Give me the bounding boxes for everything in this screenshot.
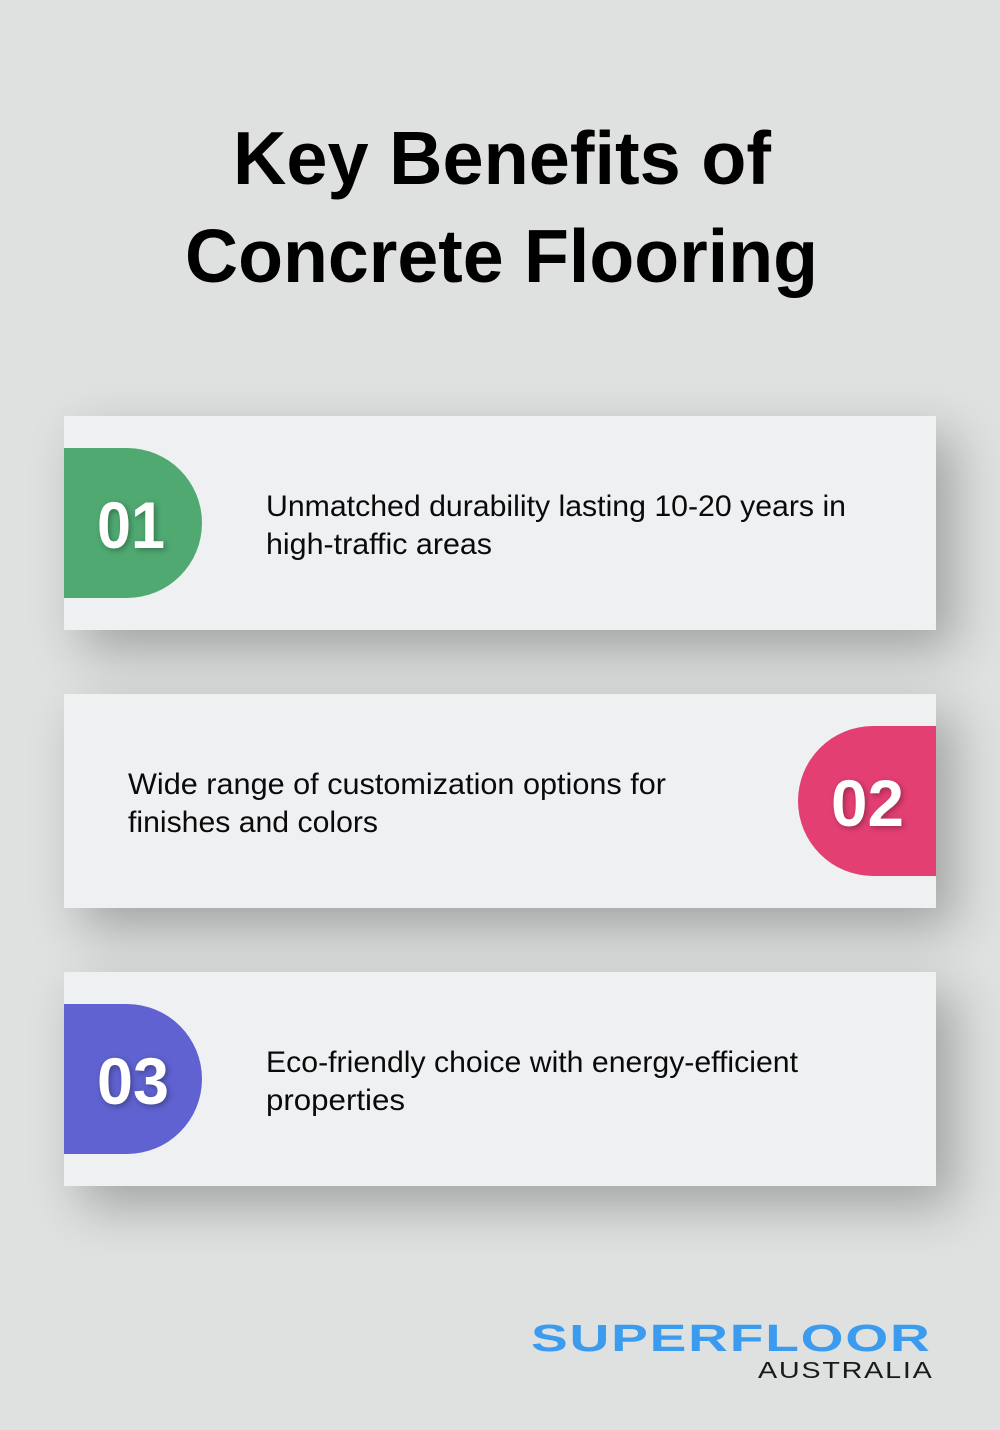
panel: benefit 03 bbox=[64, 972, 936, 1186]
text: benefit 01: high-traffic areas bbox=[266, 528, 492, 561]
text: benefit 02 bbox=[128, 768, 666, 839]
badge: 02: 02 bbox=[831, 766, 904, 840]
logo: Superfloor Australia: AUSTRALIA bbox=[758, 1357, 932, 1383]
text: benefit 01 bbox=[266, 490, 846, 561]
badge: 01: 01 bbox=[97, 488, 165, 562]
badge: 02 bbox=[798, 726, 936, 876]
title: Concrete Flooring bbox=[185, 214, 818, 298]
text: benefit 03: properties bbox=[266, 1084, 405, 1117]
badge: 03 bbox=[64, 1004, 202, 1154]
badge: 01 bbox=[64, 448, 202, 598]
badge: 03: 03 bbox=[97, 1044, 169, 1118]
title: Key Benefits of bbox=[233, 116, 772, 200]
text: benefit 03 bbox=[266, 1046, 799, 1117]
logo: Superfloor Australia: SUPERFLOOR bbox=[531, 1317, 930, 1360]
panel: benefit 01 bbox=[64, 416, 936, 630]
panel: benefit 02 bbox=[64, 694, 936, 908]
title bbox=[185, 116, 818, 298]
text: benefit 02: finishes and colors bbox=[128, 806, 378, 839]
text: benefit 01: Unmatched durability lasting 10-20 years in bbox=[266, 490, 846, 523]
text: benefit 02: Wide range of customization options for bbox=[128, 768, 666, 801]
text: benefit 03: Eco-friendly choice with energy-efficient bbox=[266, 1046, 799, 1079]
logo: Superfloor Australia bbox=[531, 1317, 932, 1383]
